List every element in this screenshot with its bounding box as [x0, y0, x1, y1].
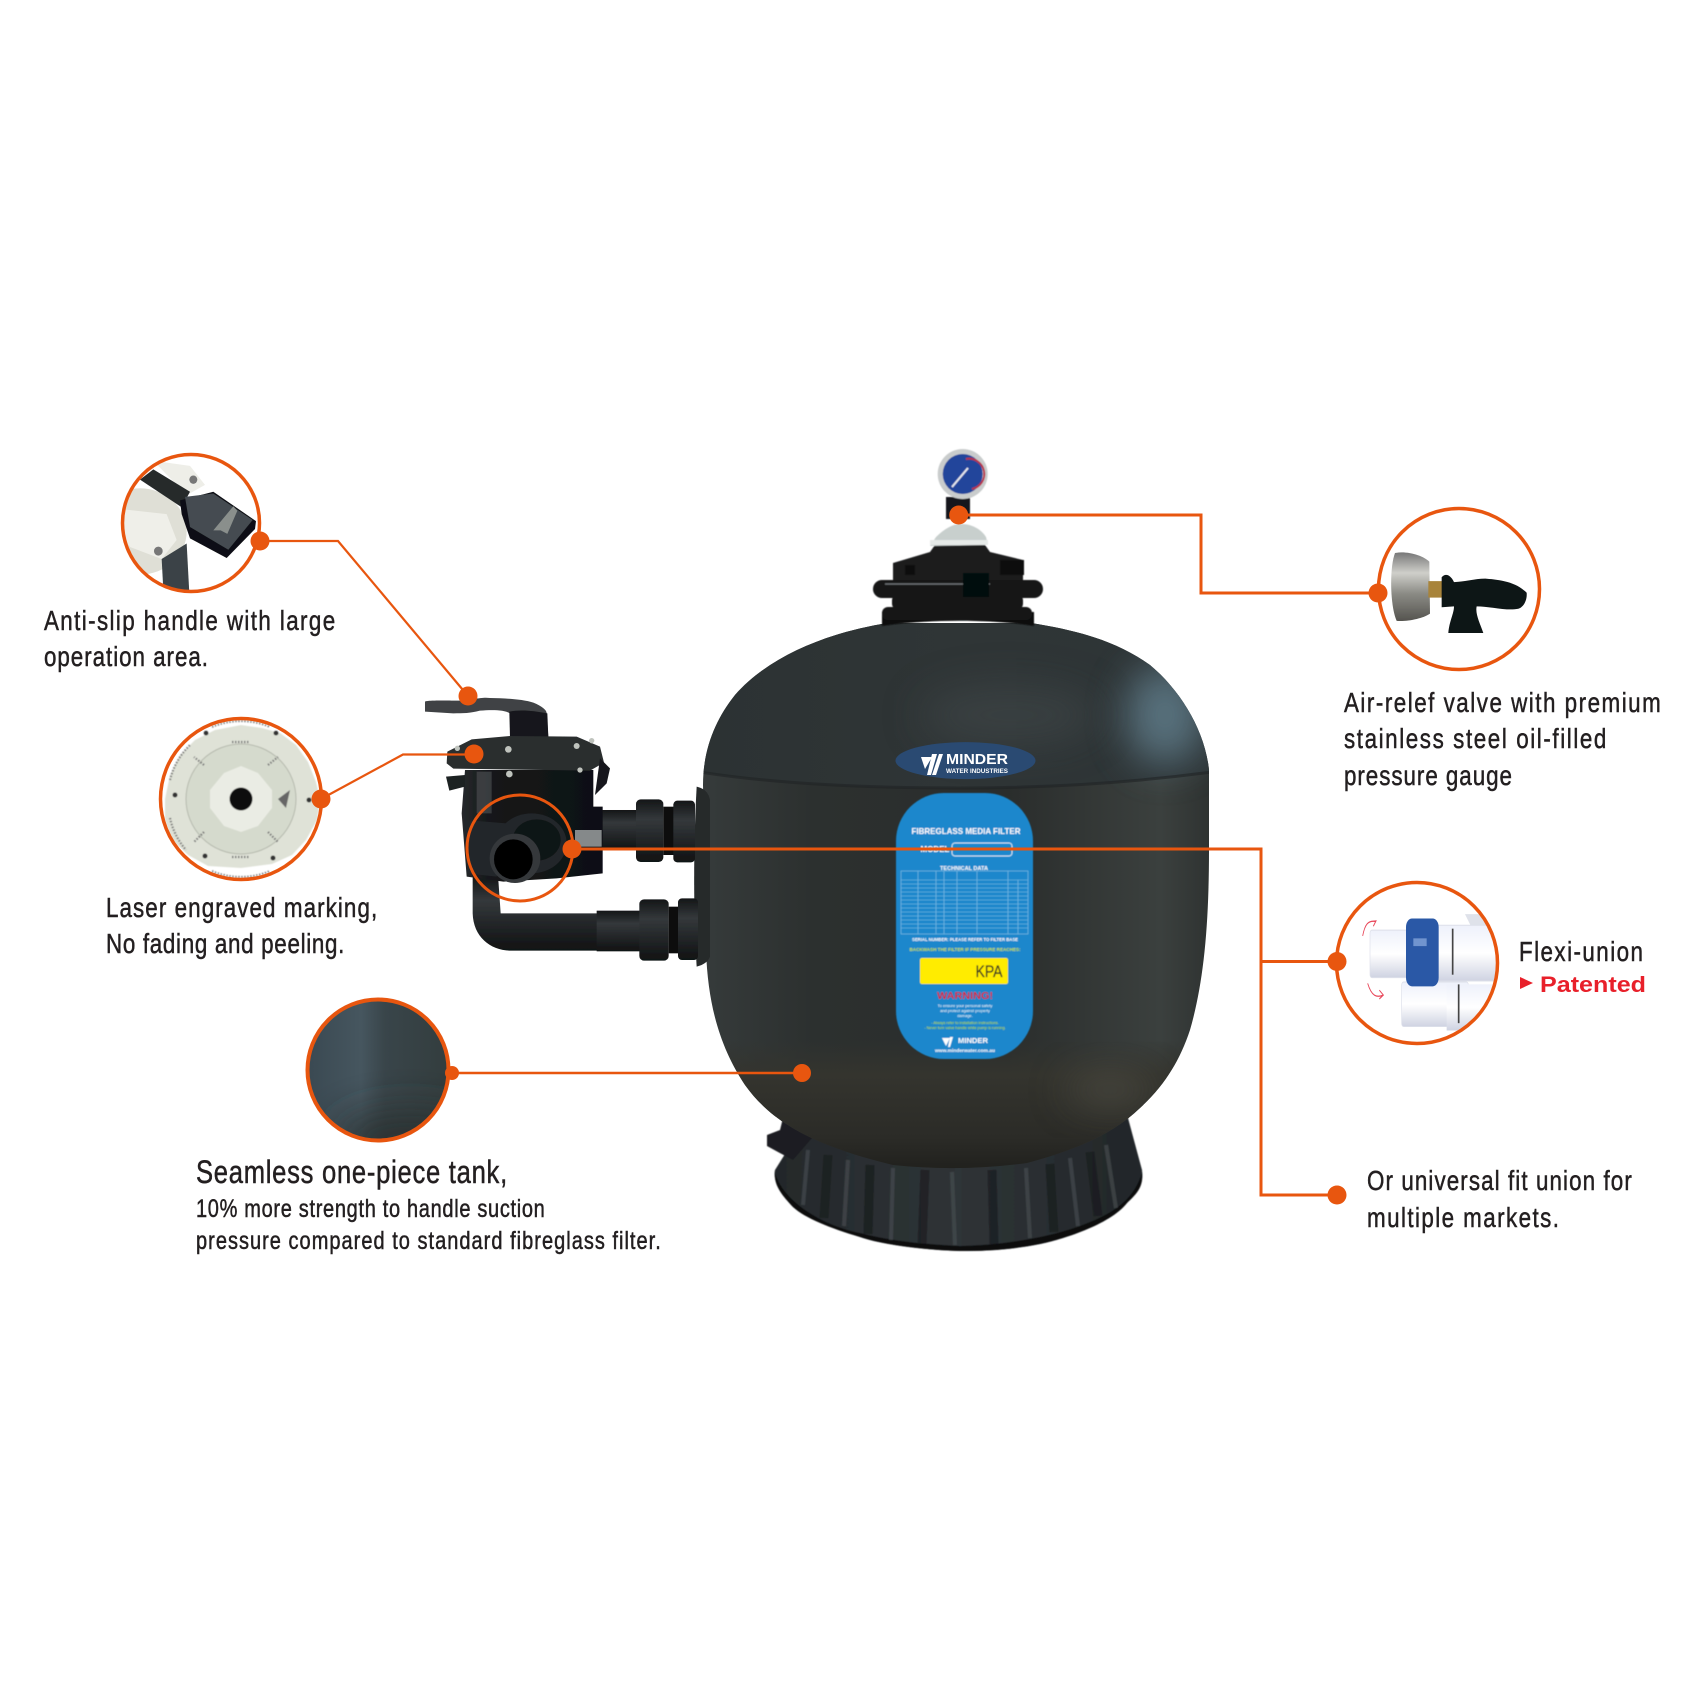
leader: engraved marking	[321, 754, 474, 799]
product label: and protect against property	[940, 1008, 990, 1013]
leader: unions	[572, 849, 1337, 1195]
filter product	[425, 449, 1212, 1251]
inset photo: tank texture	[306, 998, 450, 1142]
product label: www.minderwater.com.au	[934, 1048, 995, 1053]
product label: FIBREGLASS MEDIA FILTER	[912, 826, 1020, 836]
tank side flange	[694, 787, 710, 967]
valve body	[462, 770, 603, 882]
handle label	[44, 606, 335, 673]
inset ring	[1336, 882, 1498, 1044]
leader lines	[260, 515, 1378, 1195]
seamless label: 10% more strength to handle suction	[196, 1195, 545, 1223]
multiport valve and pipes	[425, 698, 710, 967]
product label: To ensure your personal safety	[938, 1003, 992, 1008]
inset photo: flexi union	[1363, 914, 1500, 1030]
laser label	[106, 893, 377, 960]
product label: TECHNICAL DATA	[940, 866, 988, 872]
air relief label	[1344, 688, 1661, 792]
air relief label: Air-relef valve with premium	[1344, 688, 1661, 719]
laser label: No fading and peeling.	[106, 929, 344, 960]
air relief label: stainless steel oil-filled	[1344, 724, 1606, 755]
callout: handle inset	[44, 447, 335, 673]
valve detail ring	[467, 795, 573, 901]
handle label: Anti-slip handle with large	[44, 606, 335, 637]
lower pipe	[473, 877, 698, 961]
callout dots	[250, 506, 1388, 1204]
inset photo: engraved disc	[161, 719, 321, 879]
handle label: operation area.	[44, 642, 208, 673]
brand logo oval: MINDER	[946, 751, 1008, 768]
product label: MODEL	[921, 845, 950, 854]
top closure and gauge	[873, 449, 1043, 626]
product label	[896, 793, 1033, 1059]
leader: air relief	[959, 515, 1378, 593]
product label: KPA	[976, 962, 1003, 981]
inset photo: handle	[124, 462, 256, 590]
tank base	[767, 1118, 1142, 1251]
flexi-union label: Flexi-union	[1519, 937, 1643, 968]
valve top flange	[447, 736, 604, 771]
leader: handle	[260, 541, 468, 696]
product label: WARNING!	[937, 991, 993, 1002]
inset ring	[160, 718, 322, 880]
brand logo oval: WATER INDUSTRIES	[946, 769, 1008, 775]
inset ring	[122, 454, 260, 592]
product label: damage.	[957, 1013, 973, 1018]
product label: BACKWASH THE FILTER IF PRESSURE REACHES:	[910, 947, 1021, 953]
laser label: Laser engraved marking,	[106, 893, 377, 924]
leader: tank	[452, 1072, 802, 1074]
upper pipe	[597, 799, 695, 862]
pressure gauge	[938, 449, 988, 499]
callout: flexi-union inset	[1336, 882, 1646, 1044]
callout: seamless tank inset	[196, 1000, 661, 1255]
universal union label	[1367, 1166, 1632, 1234]
tank body	[700, 620, 1212, 1180]
seamless label: pressure compared to standard fibreglass filter.	[196, 1227, 661, 1255]
technical data table	[901, 871, 1028, 934]
callout: air relief inset	[1344, 508, 1661, 792]
seamless label: Seamless one-piece tank,	[196, 1155, 507, 1191]
patented tag: Patented	[1540, 972, 1646, 997]
callout: laser engraved inset	[106, 718, 377, 960]
air relief label: pressure gauge	[1344, 761, 1512, 792]
seamless label	[196, 1155, 661, 1255]
brand logo oval	[896, 742, 1036, 779]
product label: MINDER	[958, 1038, 988, 1045]
handle	[425, 698, 548, 737]
product label: SERIAL NUMBER: PLEASE REFER TO FILTER BASE	[912, 937, 1018, 942]
valve port	[497, 813, 567, 873]
universal union label: Or universal fit union for	[1367, 1166, 1632, 1197]
universal union label: multiple markets.	[1367, 1203, 1559, 1234]
inset ring	[1378, 508, 1540, 670]
product label: - Always refer to installation instructions.	[931, 1021, 999, 1025]
product label: - Never turn valve handle while pump is running.	[924, 1026, 1006, 1030]
inset photo: air relief valve	[1391, 552, 1527, 633]
